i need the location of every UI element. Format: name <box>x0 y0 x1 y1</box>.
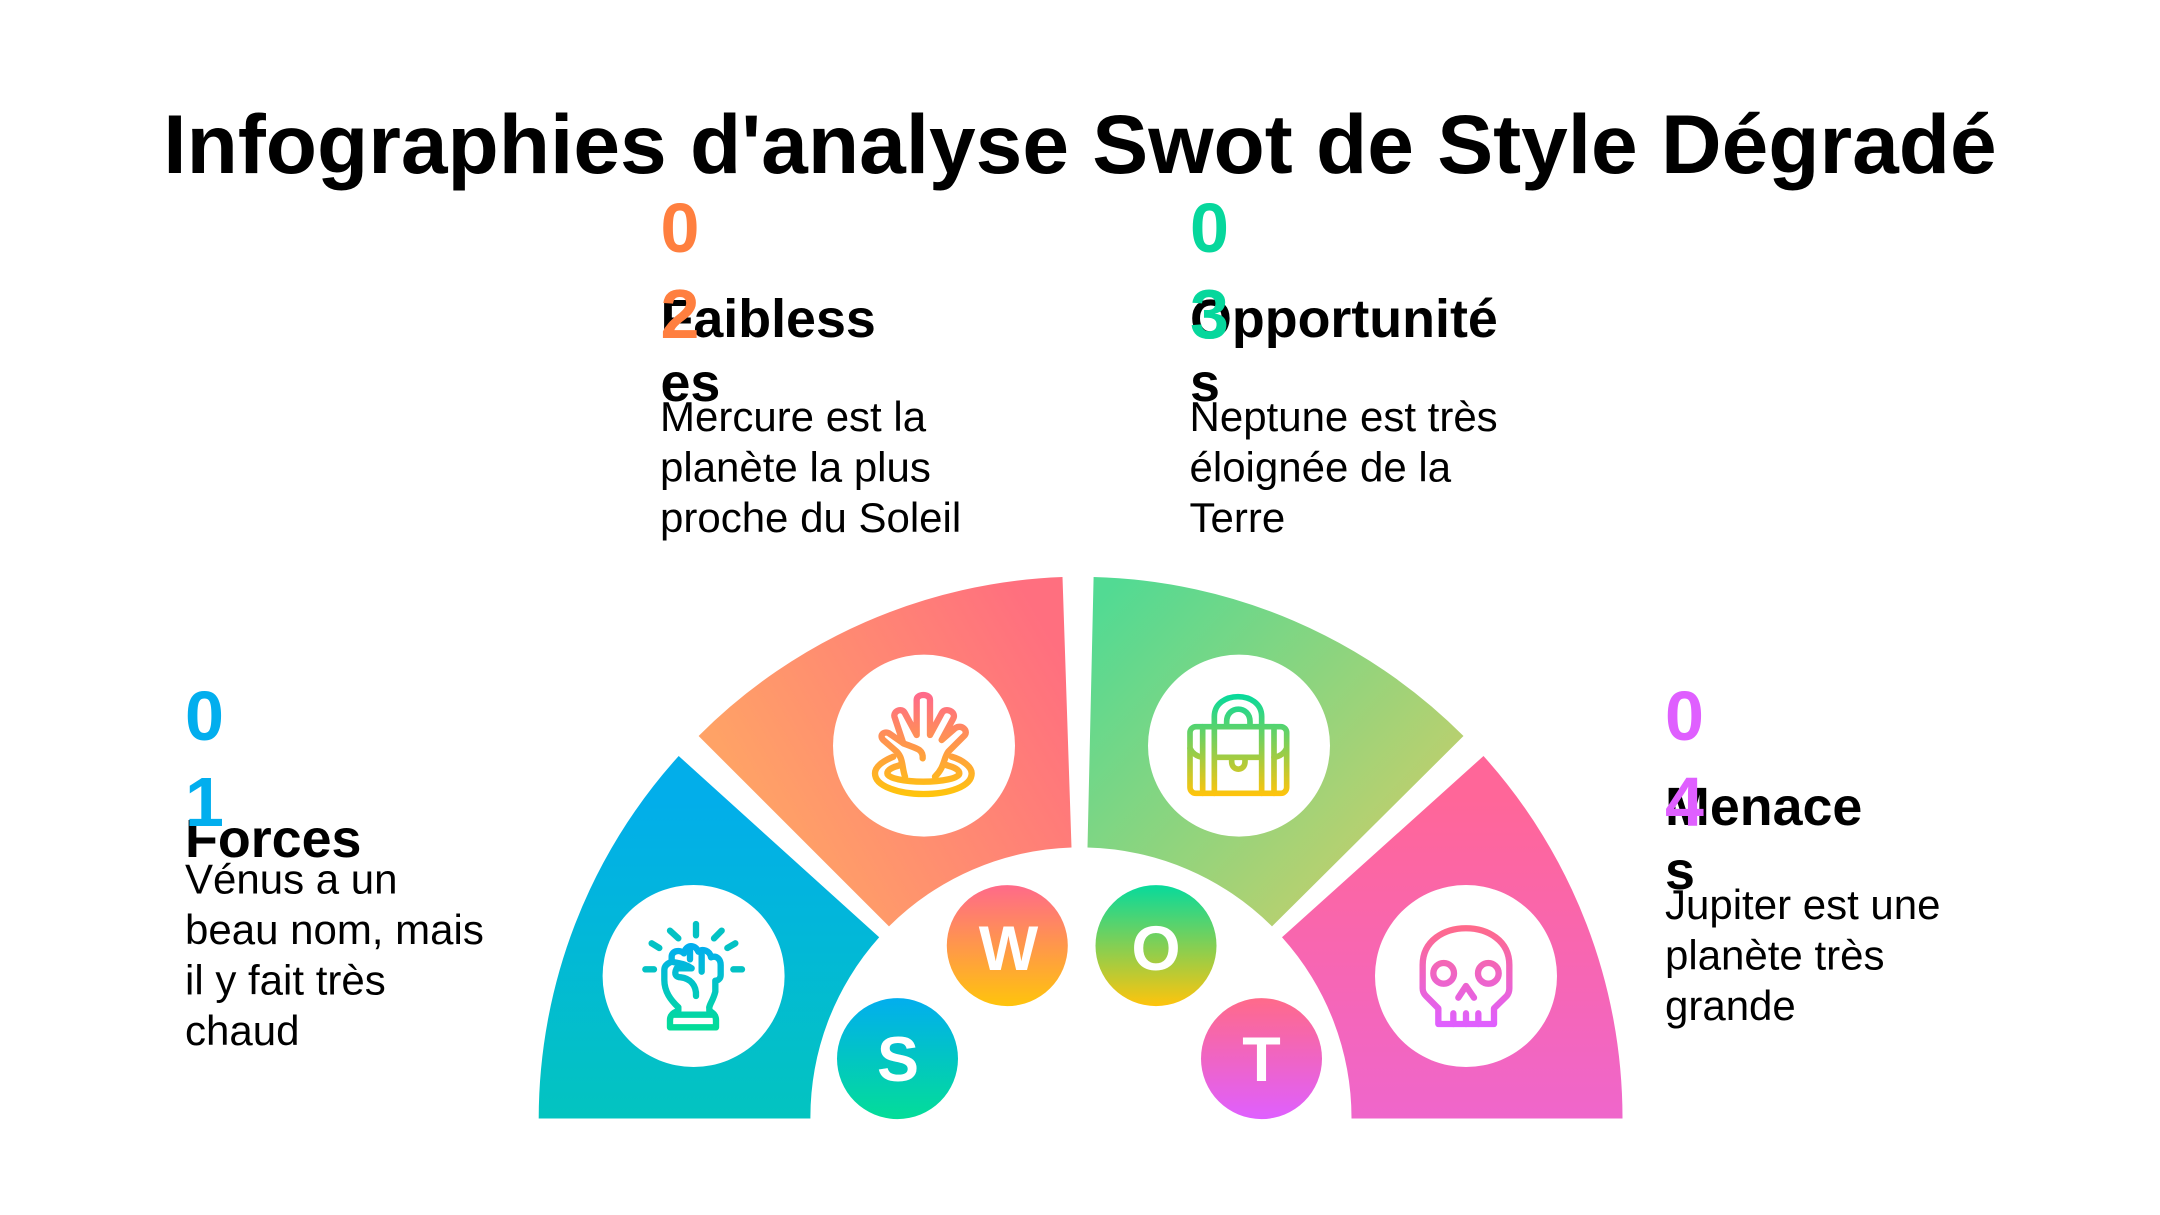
number: 03: 3 <box>1190 275 1229 353</box>
number: 01: 1 <box>185 763 224 841</box>
badge: S <box>837 998 958 1119</box>
badge: S: S <box>877 1025 919 1095</box>
icon: raised fist <box>645 924 742 1027</box>
text: opportunités description: éloignée de la <box>1190 444 1452 490</box>
text: faiblesses description: proche du Soleil <box>660 494 961 541</box>
badge: W <box>947 885 1068 1006</box>
sector: faiblesses <box>699 577 1072 926</box>
text: menaces description: planète très <box>1665 932 1884 978</box>
block: menaces <box>1665 677 1941 1029</box>
heading: menaces: s <box>1665 841 1695 901</box>
number: 02: 2 <box>660 275 699 353</box>
number: 03: 0 <box>1190 189 1229 267</box>
sector: opportunités <box>1088 577 1464 926</box>
number: 04: 0 <box>1665 677 1704 755</box>
heading: faiblesses: es <box>660 353 720 413</box>
heading: faiblesses: Faibless <box>660 289 876 349</box>
title: Infographies d'analyse Swot de Style Dégradé <box>163 97 1997 191</box>
badge: T: T <box>1242 1025 1281 1095</box>
text: forces description: Vénus a un <box>185 856 398 902</box>
text: forces description: beau nom, mais <box>185 906 484 953</box>
number: 04: 4 <box>1665 763 1704 841</box>
white disc: faiblesses <box>833 655 1015 837</box>
block: opportunités <box>1190 189 1498 541</box>
text: faiblesses description: planète la plus <box>660 444 931 490</box>
number: 01: 0 <box>185 677 224 755</box>
sector: menaces <box>1282 756 1623 1118</box>
text: faiblesses description: Mercure est la <box>660 393 927 440</box>
sector: forces <box>539 756 879 1118</box>
text: forces description: chaud <box>185 1007 299 1054</box>
heading: forces: Forces <box>185 809 361 869</box>
text: opportunités description: Terre <box>1190 494 1285 541</box>
semicircle diagram <box>539 577 1623 1118</box>
white disc: forces <box>603 885 785 1067</box>
icon: drowning hand <box>875 695 972 794</box>
block: forces <box>185 677 484 1054</box>
text: menaces description: Jupiter est une <box>1665 881 1941 928</box>
badge: T <box>1201 998 1322 1119</box>
text: forces description: il y fait très <box>185 956 386 1004</box>
white disc: menaces <box>1375 885 1557 1067</box>
badge: O: O <box>1131 914 1181 984</box>
heading: opportunités: Opportunité <box>1190 289 1498 349</box>
text: menaces description: grande <box>1665 982 1796 1029</box>
heading: opportunités: s <box>1190 353 1220 413</box>
white disc: opportunités <box>1148 655 1330 837</box>
heading: menaces: Menace <box>1665 777 1862 837</box>
badge: W: W <box>979 914 1039 984</box>
text: opportunités description: Neptune est très <box>1190 393 1498 440</box>
number: 02: 0 <box>660 189 699 267</box>
block: faiblesses <box>660 189 961 541</box>
badge: O <box>1096 885 1216 1006</box>
icon: skull <box>1423 928 1509 1024</box>
icon: briefcase <box>1190 697 1287 793</box>
